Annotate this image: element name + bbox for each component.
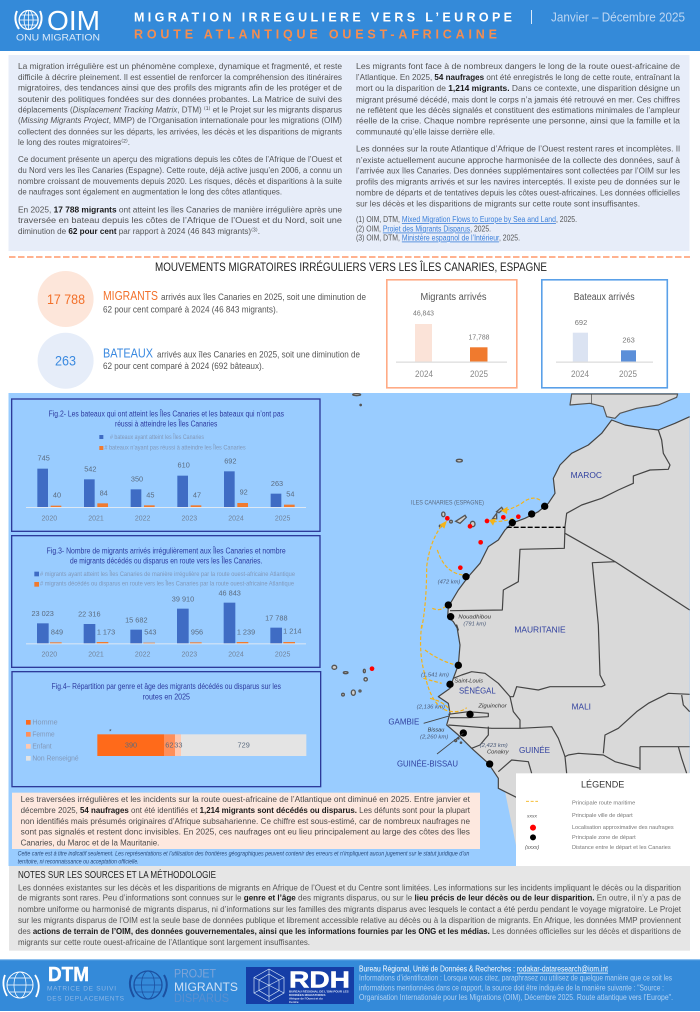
map: labels: (2,136 km) [417, 704, 445, 710]
map: labels: Conakry [487, 750, 510, 756]
logo: RDH: BUREAU RÉGIONAL DE L'OIM POUR LES [289, 988, 349, 994]
panel: legend: Principale ville de départ [572, 813, 633, 819]
footer banner [0, 959, 700, 1011]
panel: introduction: communauté qu’elle laisse derrière elle. [356, 126, 495, 136]
chart: migrants arrivés: 17,788 [468, 333, 490, 342]
panel: introduction: (3) OIM, DTM, Ministère espagnol de l’Intérieur, 2025. [356, 234, 520, 242]
logo: OIM [15, 5, 100, 44]
panel: introduction [8, 55, 690, 251]
chart: Fig.3 migrants: 46 843 [218, 589, 241, 598]
map disclaimer [18, 851, 470, 865]
chart: Fig.4 gender and age: * [109, 728, 112, 735]
panel: legend [516, 773, 700, 867]
chart: Fig.2 boats: 2024 [228, 516, 244, 523]
chart: Fig.2 boats: 47 [193, 490, 201, 499]
map: labels: (1,541 km) [421, 673, 449, 679]
chart: Fig.2 boats: 692 [224, 456, 236, 465]
chart: Fig.3 migrants [12, 536, 320, 667]
map: labels: MAURITANIE [514, 624, 566, 634]
logo: Projet Migrants Disparus: PROJET [174, 967, 217, 981]
chart: Fig.3 migrants: Fig.3- Nombre de migrants arrivés irrégulièrement aux Îles Canaries et nombre [47, 546, 286, 555]
chart: Fig.3 migrants: 1 214 [283, 627, 302, 636]
panel: introduction: traversée en bateau depuis les côtes de l’Afrique de l’Ouest et du Nord, soit une [18, 215, 342, 225]
logo: DTM [3, 964, 125, 1003]
chart: Fig.2 boats: 263 [271, 479, 283, 488]
panel: legend: LÉGENDE [581, 780, 624, 790]
chart: Fig.3 migrants: 2025 [275, 652, 291, 659]
panel: introduction: ne reflètent que les décès signalés et constituent des estimations minimales de l’ampleur [356, 105, 680, 115]
panel: introduction: migrant présumé décédé, mais dont le corps n’a jamais été retrouvé en mer. Ces chiffres [356, 94, 681, 104]
panel: introduction: n’existe actuellement aucune approche harmonisée de la collecte des données, sauf à [356, 155, 680, 165]
panel: introduction: Les migrants font face à de nombreux dangers le long de la route ouest-africaine de [356, 61, 680, 71]
chart: Fig.4 gender and age: Femme [32, 729, 55, 738]
chart: Fig.3 migrants: 1 173 [97, 628, 115, 637]
map: labels: Bissau [428, 728, 445, 734]
chart: bateaux arrivés: 263 [622, 335, 635, 344]
chart: Fig.4 gender and age: Homme [32, 717, 58, 726]
map: labels: Nouadhibou [458, 615, 492, 621]
panel: introduction: nombre croissant de mouvements depuis 2020. Les risques, décès et disparitions à la suite [18, 176, 342, 186]
chart: Fig.2 boats [12, 399, 320, 531]
map: routes [421, 498, 540, 712]
logo: RDH: DONNÉES MIGRATOIRES [289, 992, 326, 997]
panel: introduction: collectent des données sur les départs, les arrivées, les décès et les disparitions de migrants [18, 126, 343, 136]
map disclaimer: Cette carte est à titre indicatif seulement. Les représentations et l’utilisation des frontières géographiques peuvent contenir des erreurs et n’impliquent aucun jugement sur le statut juridique d’un [18, 851, 470, 857]
map: land [438, 394, 690, 857]
panel: notes on sources and methodology: des actions de terrain de l’OIM, des données gouvernementales, ainsi que les informations fournies par les ONG et les médias. Les données officielles sur les décès et disparitions de [18, 926, 681, 936]
chart: Fig.2 boats: 542 [84, 464, 96, 473]
chart: Fig.2 boats: réussi à atteindre les Îles Canaries [115, 420, 217, 429]
map: labels: (791 km) [463, 622, 486, 628]
stat: bateaux: 62 pour cent comparé à 2024 (692 bâteaux). [103, 361, 264, 371]
chart: Fig.2 boats: 2023 [182, 516, 197, 523]
logo: Projet Migrants Disparus: DISPARUS [174, 991, 229, 1005]
chart: Fig.3 migrants: 956 [191, 628, 203, 637]
logo: RDH: Afrique de l'Ouest et du [289, 996, 323, 1000]
logo: DTM: DTM [48, 964, 89, 986]
panel: introduction: soutenir des politiques fondées sur des données probantes. La Matrice de suivi des [18, 94, 343, 104]
chart: Fig.2 boats: 2022 [135, 516, 151, 523]
map: labels: ILES CANARIES (ESPAGNE) [411, 501, 484, 507]
chart: bateaux arrivés [542, 280, 667, 388]
chart: Fig.2 boats: # bateaux n’ayant pas réussi à atteindre les Îles Canaries [104, 443, 246, 452]
panel: introduction: sur les décès et les disparitions de migrants sur cette route sont insuffisantes. [356, 198, 640, 208]
callout: shipwrecks summary: non identifiés mais présumés originaires d’Afrique subsaharienne. Ce chiffre est sous-estimé, car de nombreux naufrages ne [21, 816, 470, 826]
chart: Fig.3 migrants: 23 023 [31, 609, 54, 618]
stat: bateaux: arrivés aux îles Canaries en 2025, soit une diminution de [157, 350, 360, 360]
footer contact and citation: Bureau Régional, Unité de Données & Recherches : rodakar-dataresearch@iom.int [359, 965, 609, 974]
map: labels: MALI [572, 701, 591, 711]
map: labels: (2,260 km) [420, 735, 448, 741]
header banner [0, 0, 700, 51]
panel: notes on sources and methodology: migrants sur cette route ouest-africaine de l’Atlantique sont largement insuffisantes. [18, 937, 310, 947]
title: MIGRATION IRREGULIERE VERS L’EUROPE [134, 11, 512, 25]
map: labels: GAMBIE [388, 716, 420, 726]
map background [8, 393, 690, 866]
chart: Fig.3 migrants: # migrants ayant atteint les Îles Canaries de manière irrégulière par la route ouest-africaine Atlantique [40, 569, 295, 578]
stat: migrants: 17 788 [47, 291, 85, 307]
chart: Fig.2 boats: Fig.2- Les bateaux qui ont atteint les Îles Canaries et les bateaux qui n’ont pas [49, 410, 284, 419]
panel: introduction: mort ou la disparition de 1,214 migrants. Dans ce contexte, une disparition désigne un [356, 83, 680, 93]
stat: bateaux [38, 333, 360, 389]
map: labels: GUINÉE [519, 745, 550, 755]
panel: introduction: (Missing Migrants Project, MMP) de l’Organisation internationale pour les migrations (OIM) [18, 115, 342, 125]
chart: Fig.2 boats: 40 [53, 490, 61, 499]
panel: introduction: (1) OIM, DTM, Mixed Migration Flows to Europe by Sea and Land, 2025. [356, 215, 577, 224]
chart: Fig.3 migrants: 15 682 [125, 616, 148, 625]
stat: bateaux: BATEAUX [103, 346, 153, 361]
chart: Fig.3 migrants: 543 [144, 628, 156, 637]
chart: Fig.4 gender and age: Enfant [32, 741, 52, 750]
chart: Fig.4 gender and age [12, 672, 321, 787]
chart: Fig.4 gender and age: 62 [165, 741, 173, 750]
chart: bateaux arrivés: Bateaux arrivés [574, 292, 635, 303]
chart: Fig.3 migrants: 2022 [135, 652, 151, 659]
panel: introduction: Ce document présente un aperçu des migrations depuis les côtes de l’Afrique de l’Ouest et [18, 154, 343, 164]
chart: migrants arrivés: Migrants arrivés [420, 292, 486, 303]
chart: Fig.4 gender and age: Fig.4– Répartition par genre et âge des migrants décédés ou disparus sur les [52, 682, 281, 691]
panel: introduction: La migration irrégulière est un phénomène complexe, dynamique et fragmenté, et reste [18, 61, 342, 71]
map: labels: SÉNÉGAL [459, 685, 496, 695]
chart: Fig.4 gender and age: routes en 2025 [143, 692, 190, 701]
panel: introduction: l’Atlantique. En 2025, 54 naufrages ont été enregistrés le long de cette route, entraînant la [356, 72, 680, 82]
logo: DTM: MATRICE DE SUIVI [47, 986, 116, 993]
callout: shipwrecks summary: décembre 2025, 54 naufrages ont été identifiés et 1,214 migrants sont décédés ou disparus. Les défunts sont pour la plupart [21, 805, 471, 815]
map: islands [332, 394, 503, 743]
footer contact and citation [359, 965, 673, 1002]
panel: introduction: le long des routes migratoires⁽²⁾. [18, 137, 130, 147]
chart: Fig.4 gender and age: 33 [174, 741, 182, 750]
logo: Projet Migrants Disparus [130, 967, 238, 1005]
panel: notes on sources and methodology [9, 866, 690, 951]
chart: Fig.2 boats: 92 [240, 488, 248, 497]
chart: migrants arrivés: 2024 [415, 369, 433, 380]
chart: Fig.2 boats: 84 [100, 488, 108, 497]
panel: introduction: l’arrivée aux îles Canaries. Des données supplémentaires sont collectées par l’OIM sur les [356, 166, 681, 176]
chart: Fig.3 migrants: 1 239 [237, 628, 255, 637]
panel: introduction: profils des migrants arrivés et sur les navires interceptés. Il existe peu de données sur le [356, 177, 680, 187]
stat: migrants: MIGRANTS [103, 288, 158, 303]
map: labels: (2,423 km) [480, 743, 508, 749]
panel: legend: Principale route maritime [572, 801, 635, 807]
map: labels: GUINÉE-BISSAU [397, 758, 458, 768]
chart: Fig.3 migrants: 2020 [42, 652, 57, 659]
stat: migrants [38, 271, 366, 327]
callout: shipwrecks summary: Les traversées irrégulières et les incidents sur la route ouest-africaine de l’Atlantique ont diminué en 2025. Entre janvier et [21, 794, 471, 804]
chart: Fig.2 boats: 2025 [275, 516, 291, 523]
chart: Fig.3 migrants: 2024 [228, 652, 244, 659]
chart: bateaux arrivés: 692 [575, 318, 587, 327]
callout: shipwrecks summary: Canaries, du Maroc et de la Mauritanie. [21, 837, 159, 847]
chart: Fig.2 boats: 54 [286, 490, 294, 499]
logo: OIM: ONU MIGRATION [16, 33, 100, 44]
panel: introduction: diminution de 62 pour cent par rapport à 2024 (46 843 migrants)⁽³⁾. [18, 226, 260, 236]
panel: introduction: (2) OIM, Projet des Migrants Disparus, 2025. [356, 224, 491, 234]
chart: Fig.3 migrants: 2023 [182, 652, 197, 659]
chart: Fig.2 boats: 745 [38, 453, 50, 462]
map: labels: (472 km) [438, 579, 460, 585]
panel: introduction: de naufrages sont également en augmentation le long des côtes atlantiques. [18, 187, 282, 197]
logo: RDH: RDH [289, 967, 350, 993]
left column: charts and callout [12, 399, 480, 865]
subtitle: ROUTE ATLANTIQUE OUEST-AFRICAINE [134, 27, 497, 41]
map: West Africa and Canary Islands [332, 394, 700, 867]
map: labels: Ziguinchor [477, 703, 508, 709]
heading: mouvements migratoires: MOUVEMENTS MIGRATOIRES IRRÉGULIERS VERS LES ÎLES CANARIES, ESPAGNE [155, 261, 547, 274]
callout: shipwrecks summary [12, 793, 480, 849]
panel: notes on sources and methodology: NOTES SUR LES SOURCES ET LA MÉTHODOLOGIE [18, 868, 216, 881]
chart: Fig.3 migrants: # migrants décédés ou disparus en route vers les Îles Canaries par la route ouest-africaine Atlantique [40, 579, 294, 588]
panel: legend: Distance entre le départ et les Canaries [572, 845, 671, 851]
chart: Fig.3 migrants: 39 910 [172, 595, 194, 604]
panel: introduction: du Nord vers les îles Canaries (Espagne). Cette route, déjà active jusqu’en 2006, a connu un [18, 165, 342, 175]
panel: introduction: migratoires, des tendances ainsi que des profils des migrants afin de les protéger et de [18, 82, 342, 92]
chart: Fig.2 boats: 2021 [88, 516, 104, 523]
chart: Fig.2 boats: 610 [178, 460, 190, 469]
map: shipwreck locations [370, 514, 521, 671]
panel: notes on sources and methodology: de migrants sont rares. Peu d’informations sont connues sur le genre et l’âge des migrants disparus, ou sur le lieu précis de leur décès ou de leur disparition. En outre, il n’y a pas de [18, 893, 681, 903]
panel: legend: Principale zone de départ [572, 835, 636, 841]
chart: Fig.4 gender and age: 390 [125, 741, 137, 750]
map: labels: Saint-Louis [454, 679, 483, 685]
chart: Fig.4 gender and age: Non Renseigné [32, 753, 79, 762]
chart: migrants arrivés: 46,843 [413, 309, 434, 318]
chart: migrants arrivés: 2025 [470, 369, 488, 380]
chart: Fig.2 boats: # bateaux ayant atteint les Îles Canaries [110, 432, 205, 441]
chart: Fig.3 migrants: 2021 [88, 652, 104, 659]
panel: introduction: En 2025, 17 788 migrants ont atteint les îles Canaries de manière irrégulière après une [18, 204, 342, 214]
stat: migrants: 62 pour cent comparé à 2024 (46 843 migrants). [103, 304, 278, 314]
stat: bateaux: 263 [55, 353, 76, 369]
stat: migrants: arrivés aux îles Canaries en 2025, soit une diminution de [161, 292, 366, 302]
chart: Fig.2 boats: 45 [146, 490, 154, 499]
logo: Projet Migrants Disparus: MIGRANTS [174, 980, 238, 994]
callout: shipwrecks summary: sont pas signalés et restent donc invisibles. En 2025, ces naufrages ont eu lieu principalement au large des côtes des îles [21, 827, 471, 837]
chart: Fig.3 migrants: 849 [51, 628, 63, 637]
panel: introduction: difficile à décrire pleinement. Il est essentiel de renforcer la compréhension des itinéraires [18, 72, 343, 82]
chart: Fig.3 migrants: de migrants décédés ou disparus en route vers les Îles Canaries. [70, 556, 262, 565]
chart: Fig.2 boats: 350 [131, 474, 143, 483]
logo: OIM: OIM [47, 5, 100, 36]
chart: bateaux arrivés: 2024 [571, 369, 589, 380]
panel: legend: Localisation approximative des naufrages [572, 825, 674, 831]
logo: RDH [246, 967, 354, 1004]
logo: RDH: Centre [289, 1000, 299, 1004]
chart: Fig.3 migrants: 22 316 [78, 610, 101, 619]
chart: Fig.3 migrants: 17 788 [265, 614, 288, 623]
map: departure zones [445, 503, 548, 768]
map: labels [388, 470, 602, 768]
map: labels: MAROC [571, 470, 602, 480]
chart: bateaux arrivés: 2025 [619, 369, 637, 380]
chart: migrants arrivés [387, 280, 517, 388]
panel: introduction: Les données sur la route Atlantique d’Afrique de l’Ouest restent rares et incomplètes. Il [356, 144, 680, 154]
chart: Fig.4 gender and age: 729 [238, 741, 250, 750]
date: Janvier – Décembre 2025 [551, 10, 685, 25]
panel: legend: (xxxx) [525, 845, 539, 851]
chart: Fig.2 boats: 2020 [42, 516, 57, 523]
panel: introduction: déplacements (Displacement Tracking Matrix, DTM) ⁽¹⁾ et le Projet sur les migrants disparus [18, 104, 343, 114]
panel: introduction: réelle de la crise. Chaque nombre représente une personne, ainsi que la famille et la [356, 116, 680, 126]
panel: legend: xxxx [526, 813, 537, 819]
map disclaimer: territoire, ni reconnaissance ou acceptation officielle. [18, 859, 139, 865]
logo: DTM: DES DEPLACEMENTS [47, 996, 125, 1003]
